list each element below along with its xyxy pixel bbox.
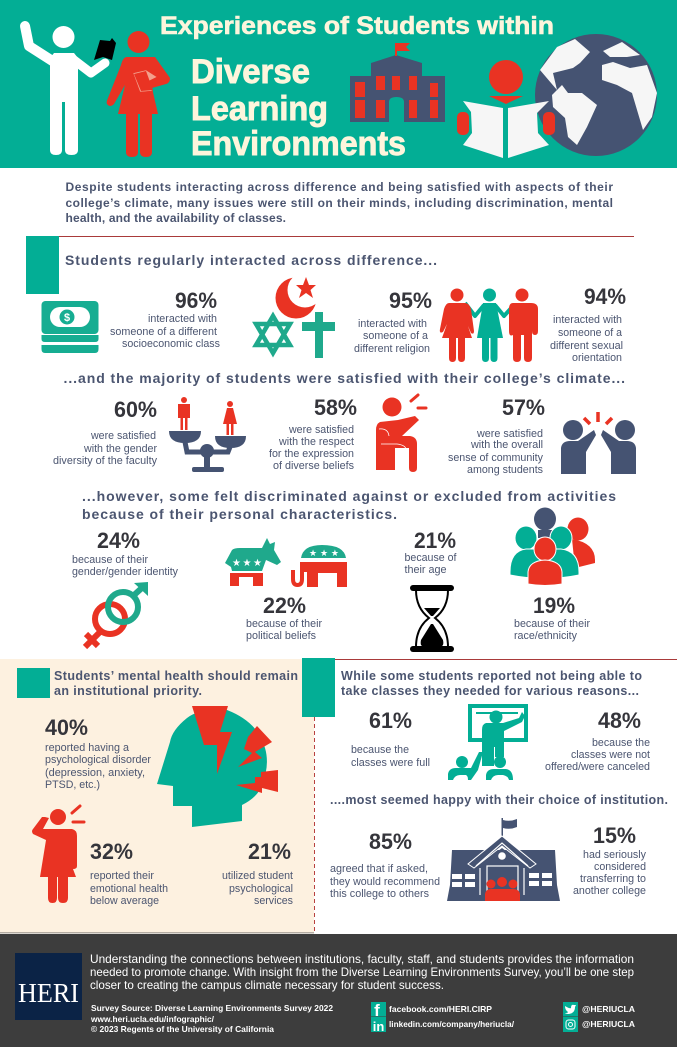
icon: high five	[561, 412, 636, 474]
red man	[509, 288, 538, 362]
source credits: © 2023 Regents of the University of California	[91, 1024, 274, 1034]
icon: twitter	[563, 1002, 578, 1016]
stat: 61%: because the	[351, 744, 409, 756]
stat: 21% age: 21%	[414, 528, 456, 553]
heading: discrimination: because of their personal characteristics.	[82, 506, 397, 522]
stat: 61%: 61%	[369, 708, 412, 733]
stat: 60%: were satisfied	[90, 430, 156, 442]
stat: 60%: diversity of the faculty	[53, 455, 157, 467]
stat: 96%: 96%	[175, 288, 217, 313]
intro paragraph: health, and the availability of classes.	[66, 211, 286, 225]
social handles: @HERIUCLA	[582, 1019, 635, 1029]
stat: 96%: socioeconomic class	[122, 338, 220, 350]
icon: woman with headache	[32, 806, 84, 903]
source credits	[90, 1003, 333, 1034]
stat: 40%: 40%	[45, 715, 88, 740]
heading: happy with institution: ....most seemed happy with their choice of institution.	[330, 793, 668, 807]
icon: globe	[535, 34, 657, 156]
stat: 19%	[514, 593, 590, 642]
stat: 21% services: 21%	[248, 839, 291, 864]
stat: 57%	[448, 395, 545, 476]
icon: religious symbols	[256, 272, 335, 358]
icon: linkedin	[371, 1017, 386, 1034]
footer	[0, 934, 677, 1047]
title: Environments	[191, 125, 406, 163]
stat: 95%: interacted with	[358, 318, 427, 330]
icon: instagram	[563, 1017, 578, 1032]
stat: 48%: offered/were canceled	[545, 761, 650, 773]
closing statement: needed to promote change. With insight from the Diverse Learning Environments Survey, you’ll be one step	[90, 965, 634, 979]
stat: 85%: they would recommend	[330, 876, 440, 888]
section marker: teal block	[302, 658, 335, 717]
stat: 15%: 15%	[593, 823, 636, 848]
stat: 85%: agreed that if asked,	[330, 863, 428, 875]
stat: 58%: were satisfied	[288, 424, 354, 436]
stat: 24%	[72, 528, 178, 578]
heading: classes: take classes they needed for various reasons...	[341, 684, 639, 698]
icon: facebook	[371, 1001, 386, 1020]
heading: satisfied with climate: ...and the majority of students were satisfied with their college’s climate...	[64, 370, 625, 386]
stat: 40%: PTSD, etc.)	[45, 779, 100, 791]
stat: 15%: had seriously	[583, 849, 646, 861]
closing statement: Understanding the connections between institutions, faculty, staff, and students provides the information	[90, 952, 634, 966]
icon: republican elephant	[293, 545, 347, 587]
icon: money stack	[42, 301, 98, 353]
title: Diverse	[191, 53, 310, 91]
icon: linkedin: in	[373, 1019, 384, 1034]
stat: 61%	[351, 708, 430, 769]
title	[160, 12, 554, 163]
stat: 24%: gender/gender identity	[72, 566, 178, 578]
stat: 21% services: psychological	[229, 883, 293, 895]
stat: 96%: interacted with	[148, 313, 217, 325]
stat: 85%: this college to others	[330, 888, 429, 900]
icon: republican elephant: ★★★	[309, 548, 339, 558]
heading: discrimination: ...however, some felt discriminated against or excluded from activities	[82, 488, 616, 504]
stat: 21% age	[404, 528, 457, 576]
logo: HERI	[15, 953, 82, 1020]
icon: hourglass	[410, 585, 454, 652]
stat: 21% services	[222, 839, 294, 907]
heading: discrimination	[82, 488, 616, 522]
stat: 57%: among students	[467, 464, 543, 476]
stat: 57%: sense of community	[448, 452, 543, 464]
icon: facebook: f	[374, 1001, 380, 1020]
stat: 21% age: because of	[404, 552, 457, 564]
social links	[389, 1004, 515, 1029]
stat: 94%: different sexual	[550, 340, 623, 352]
stat: 24%: because of their	[72, 554, 148, 566]
stat: 95%: 95%	[389, 288, 432, 313]
stat: 15%: considered	[594, 861, 646, 873]
stat: 58%: of diverse beliefs	[273, 460, 354, 472]
stat: 22%: because of their	[246, 618, 322, 630]
stat: 94%: someone of a	[558, 327, 623, 339]
icon: red woman with clipboard	[107, 31, 170, 157]
stat: 48%: because the	[592, 737, 650, 749]
stat: 94%: 94%	[584, 284, 626, 309]
heading: mental health: an institutional priority.	[54, 684, 202, 698]
stat: 21% age: their age	[404, 564, 446, 576]
stat: 15%	[573, 823, 646, 897]
icon: head with lightning bolts	[157, 706, 278, 827]
stat: 94%: orientation	[572, 352, 622, 364]
stat: 21% services: utilized student	[222, 870, 294, 882]
icon: school with people	[447, 818, 560, 901]
stat: 94%	[550, 284, 626, 364]
social links: facebook.com/HERI.CIRP	[389, 1004, 492, 1014]
icon: democratic donkey: ★★★	[232, 558, 262, 569]
heading: mental health: Students’ mental health should remain	[54, 669, 298, 683]
icon: gender symbols	[85, 582, 148, 647]
social handles: @HERIUCLA	[582, 1004, 635, 1014]
stat: 24%: 24%	[97, 528, 140, 553]
icon: balance scale	[169, 397, 246, 472]
stat: 48%: 48%	[598, 708, 641, 733]
section marker: teal block	[26, 236, 59, 294]
stat: 57%: were satisfied	[476, 428, 543, 440]
header banner	[0, 0, 677, 168]
stat: 60%	[53, 397, 157, 467]
stat: 61%: classes were full	[351, 757, 430, 769]
stat: 32%	[90, 839, 168, 907]
section marker: teal block	[17, 668, 50, 698]
stat: 32%: reported their	[90, 870, 154, 882]
stat: 40%	[45, 715, 151, 791]
stat: 95%: different religion	[354, 343, 430, 355]
stat: 48%: classes were not	[571, 749, 651, 761]
source credits: www.heri.ucla.edu/infographic/	[90, 1014, 215, 1024]
stat: 32%: below average	[90, 895, 159, 907]
icon: three people	[440, 288, 538, 362]
icon: teacher and students	[448, 706, 526, 780]
stat: 19%: 19%	[533, 593, 575, 618]
stat: 40%: psychological disorder	[45, 754, 151, 766]
heading: classes	[341, 669, 642, 698]
red woman	[440, 288, 474, 362]
closing statement: closer to creating the campus climate necessary for student success.	[90, 978, 444, 992]
stat: 58%: for the expression	[269, 448, 354, 460]
stat: 60%: with the gender	[83, 443, 157, 455]
stat: 40%: (depression, anxiety,	[45, 767, 145, 779]
stat: 57%: 57%	[502, 395, 545, 420]
stat: 19%: race/ethnicity	[514, 630, 577, 642]
intro paragraph: Despite students interacting across difference and being satisfied with aspects of their	[66, 180, 613, 194]
stat: 60%: 60%	[114, 397, 157, 422]
social handles	[582, 1004, 635, 1029]
intro paragraph	[66, 180, 613, 225]
stat: 15%: another college	[573, 885, 646, 897]
icon: seated person speaking	[376, 395, 426, 472]
icon: money stack: $	[64, 312, 70, 324]
stat: 95%	[354, 288, 432, 355]
stat: 58%: 58%	[314, 395, 357, 420]
icon: democratic donkey	[225, 538, 281, 586]
social links: linkedin.com/company/heriucla/	[389, 1019, 515, 1029]
stat: 22%: political beliefs	[246, 630, 316, 642]
icon: reader with book	[457, 60, 555, 158]
stat: 19%: because of their	[514, 618, 590, 630]
heading: mental health	[54, 669, 298, 698]
stat: 94%: interacted with	[553, 314, 622, 326]
stat: 96%: someone of a different	[110, 326, 218, 338]
stat: 22%	[246, 593, 322, 642]
intro paragraph: college’s climate, many issues were still on their minds, including discrimination, mental	[66, 196, 613, 210]
title: Experiences of Students within	[160, 12, 554, 40]
stat: 21% services: services	[254, 895, 293, 907]
stat: 57%: with the overall	[470, 439, 543, 451]
stat: 58%	[269, 395, 357, 472]
icon: diverse group	[510, 508, 595, 586]
heading: classes: While some students reported not being able to	[341, 669, 642, 683]
icon: white man with book	[25, 26, 116, 155]
logo: HERI: HERI	[18, 978, 79, 1008]
stat: 48%	[545, 708, 651, 773]
stat: 85%: 85%	[369, 829, 412, 854]
stat: 95%: someone of a	[363, 330, 429, 342]
stat: 40%: reported having a	[45, 742, 130, 754]
panel: mental health	[0, 659, 314, 934]
title: Learning	[191, 90, 328, 128]
icon: university building	[350, 43, 445, 122]
closing statement	[90, 952, 634, 992]
stat: 15%: transferring to	[580, 873, 646, 885]
heading: interacted across difference: Students regularly interacted across difference...	[65, 252, 437, 268]
source credits: Survey Source: Diverse Learning Environments Survey 2022	[91, 1003, 333, 1013]
stat: 85%	[330, 829, 440, 900]
stat: 32%: emotional health	[90, 883, 168, 895]
stat: 96%	[110, 288, 220, 350]
stat: 58%: with the respect	[278, 436, 355, 448]
stat: 32%: 32%	[90, 839, 133, 864]
teal person	[465, 288, 514, 362]
stat: 22%: 22%	[263, 593, 306, 618]
